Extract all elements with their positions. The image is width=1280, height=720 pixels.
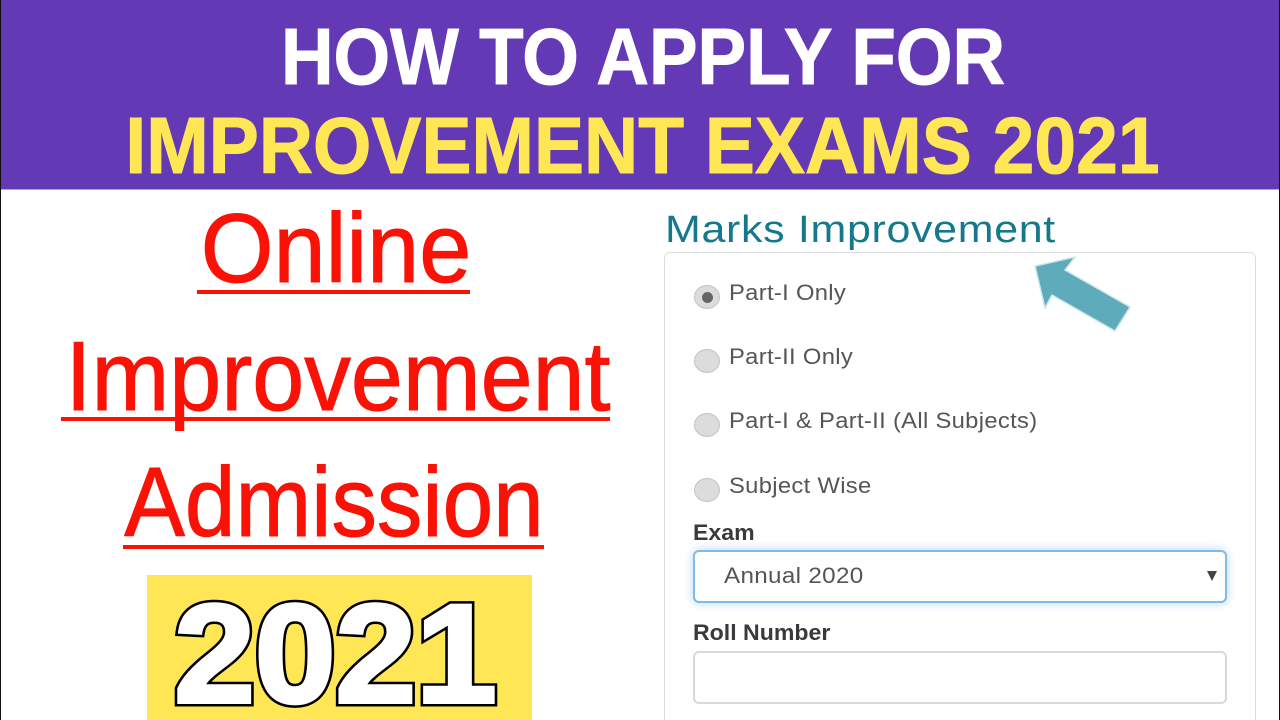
- heading word: Admission: Admission: [124, 447, 544, 557]
- form panel: [664, 252, 1256, 720]
- heading word: Online: Online: [201, 193, 471, 303]
- year badge: [147, 575, 532, 720]
- select value: Annual 2020: [724, 563, 864, 588]
- radio empty: [694, 478, 720, 502]
- label: Part-I & Part-II (All Subjects): [729, 408, 1037, 433]
- radio option: Part-II Only: [694, 344, 853, 373]
- radio option: Part-I Only: [694, 280, 846, 309]
- left heading: Online Improvement Admission: [61, 193, 610, 557]
- exam label: Exam: [693, 520, 755, 545]
- radio empty: [694, 349, 720, 373]
- radio selected: [694, 285, 720, 309]
- radio option: Subject Wise: [694, 473, 872, 502]
- form heading: Marks Improvement: Marks Improvement: [665, 209, 1056, 251]
- label: Subject Wise: [729, 473, 872, 498]
- arrow pointing at heading: [1034, 256, 1131, 332]
- label: Part-I Only: [729, 280, 846, 305]
- title line two: IMPROVEMENT EXAMS 2021: [125, 101, 1160, 190]
- title banner: [0, 0, 1280, 190]
- roll number label: Roll Number: [693, 620, 830, 645]
- exam select: [693, 550, 1227, 603]
- select caret: [1207, 571, 1217, 581]
- heading word: Improvement: Improvement: [66, 321, 610, 431]
- roll number input: [693, 651, 1227, 704]
- label: Part-II Only: [729, 344, 853, 369]
- radio option: Part-I and Part-II: [694, 408, 1037, 437]
- title line one: HOW TO APPLY FOR: [281, 12, 1005, 101]
- radio empty: [694, 413, 720, 437]
